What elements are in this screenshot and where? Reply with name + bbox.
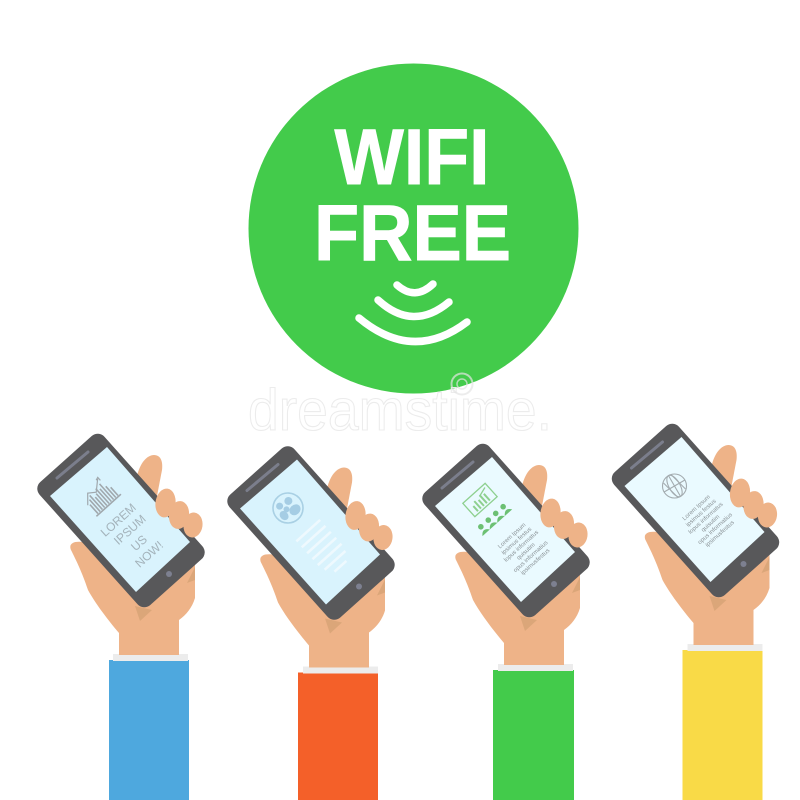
screen text: opus informatius bbox=[697, 512, 734, 546]
fingers bbox=[344, 500, 394, 551]
phone bbox=[34, 430, 208, 611]
arm 1: blue sleeve bbox=[34, 430, 208, 800]
phone bbox=[419, 440, 593, 621]
green wifi free badge bbox=[248, 64, 578, 394]
icon: globe bbox=[662, 473, 686, 499]
fingers bbox=[728, 477, 779, 529]
screen text: Lorem Ipsum bbox=[682, 494, 712, 522]
sleeve bbox=[109, 660, 189, 800]
phone bbox=[608, 420, 783, 601]
icon: green people bbox=[475, 501, 512, 536]
screen bbox=[50, 447, 190, 592]
icon: green board bbox=[463, 483, 497, 517]
screen text: LOREM bbox=[98, 501, 139, 540]
screen bbox=[240, 460, 380, 604]
screen text bbox=[98, 501, 170, 574]
screen text: opus informatius bbox=[513, 540, 549, 574]
screen bbox=[435, 457, 575, 602]
screen text: lopus informatus bbox=[503, 530, 540, 564]
screen text: ipsimus festus bbox=[501, 527, 533, 556]
arm 2: orange sleeve bbox=[224, 443, 398, 800]
screen text: quisutim bbox=[701, 514, 721, 534]
sleeve bbox=[298, 672, 378, 800]
screen text: ipsimusfestus bbox=[520, 548, 551, 577]
heading: wifi: WIFI bbox=[334, 112, 490, 201]
screen text: US bbox=[128, 532, 150, 554]
screen text: NOW! bbox=[132, 538, 166, 570]
watermark: dreamstime. bbox=[248, 378, 552, 443]
screen text bbox=[494, 519, 554, 579]
fingers bbox=[154, 487, 204, 539]
arm 3: green sleeve bbox=[419, 440, 593, 800]
phone bbox=[224, 443, 398, 623]
fingers bbox=[539, 497, 589, 549]
sleeve bbox=[493, 670, 574, 800]
icon: people circle bbox=[267, 487, 309, 529]
sleeve bbox=[682, 650, 762, 800]
screen text lines bbox=[296, 520, 352, 577]
heading: free: FREE bbox=[314, 188, 511, 277]
arm 4: yellow sleeve bbox=[608, 420, 783, 800]
screen text: Lorem Ipsum bbox=[497, 522, 527, 550]
icon: chart bbox=[78, 473, 121, 516]
screen text: lopus informatus bbox=[688, 502, 725, 536]
icon: wifi arcs bbox=[359, 284, 467, 342]
screen text: ipsimusfestus bbox=[705, 520, 736, 549]
screen text bbox=[678, 491, 739, 551]
screen text: IPSUM bbox=[111, 512, 149, 548]
screen text: quisutim bbox=[516, 542, 537, 562]
screen bbox=[624, 437, 764, 582]
screen text: ipsimus festus bbox=[685, 499, 718, 528]
